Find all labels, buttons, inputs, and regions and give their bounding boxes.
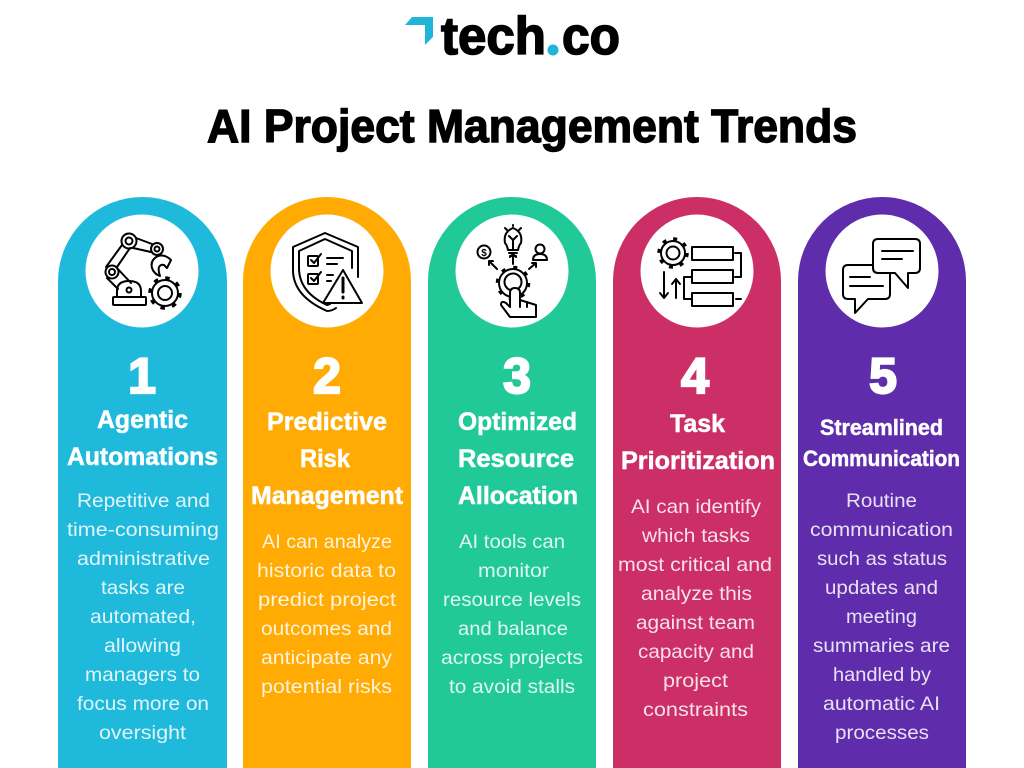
- body text: [257, 531, 397, 698]
- body text: [67, 490, 219, 744]
- heading: Streamlined: [820, 415, 943, 440]
- body text: resource levels: [443, 589, 581, 611]
- number 1: 1: [128, 348, 156, 404]
- icon: speech bubbles: [843, 239, 920, 313]
- body text: meeting: [846, 606, 917, 628]
- body text: against team: [636, 612, 755, 634]
- icon: gear, hand and resources: $: [481, 248, 487, 259]
- body text: automated,: [90, 606, 196, 628]
- body text: communication: [810, 519, 953, 541]
- body text: Routine: [846, 490, 917, 512]
- body text: [618, 496, 772, 721]
- heading: Risk: [300, 445, 350, 473]
- body text: most critical and: [618, 554, 772, 576]
- number 2: 2: [313, 348, 341, 404]
- body text: such as status: [817, 548, 947, 570]
- body text: summaries are: [813, 635, 950, 657]
- heading: Automations: [67, 443, 218, 471]
- body text: [810, 490, 953, 744]
- heading: Task: [670, 410, 725, 438]
- heading: Optimized: [458, 408, 577, 436]
- panel: task prioritization: [613, 197, 781, 768]
- body text: Repetitive and: [77, 490, 210, 512]
- body text: to avoid stalls: [449, 676, 575, 698]
- panel: optimized resource allocation: [428, 197, 596, 768]
- body text: [441, 531, 583, 698]
- logo: tech.co: tech: [441, 7, 546, 66]
- body text: which tasks: [641, 525, 750, 547]
- body text: processes: [835, 722, 929, 744]
- body text: administrative: [77, 548, 210, 570]
- icon: shield checklist with warning: [293, 233, 362, 311]
- icon: robot arm and gear: [106, 234, 180, 308]
- body text: focus more on: [77, 693, 209, 715]
- body text: monitor: [478, 560, 550, 582]
- heading: Resource: [458, 445, 574, 473]
- body text: oversight: [99, 722, 187, 744]
- panel: agentic automations: [58, 197, 227, 768]
- body text: time-consuming: [67, 519, 219, 541]
- body text: AI tools can: [459, 531, 565, 553]
- icon: gear, hand and resources: [478, 225, 547, 317]
- heading: [803, 415, 960, 471]
- panel: predictive risk management: [243, 197, 411, 768]
- body text: tasks are: [101, 577, 185, 599]
- heading: [67, 406, 218, 471]
- body text: handled by: [833, 664, 931, 686]
- title: AI Project Management Trends: [207, 100, 857, 152]
- body text: AI can analyze: [262, 531, 392, 553]
- body text: historic data to: [257, 560, 396, 582]
- body text: capacity and: [638, 641, 754, 663]
- number 5: 5: [869, 348, 897, 404]
- logo: tech.co: [405, 7, 620, 66]
- body text: analyze this: [641, 583, 752, 605]
- body text: anticipate any: [261, 647, 392, 669]
- heading: [458, 408, 578, 510]
- heading: Allocation: [458, 482, 578, 510]
- heading: Predictive: [267, 408, 387, 436]
- body text: automatic AI: [823, 693, 940, 715]
- body text: predict project: [258, 589, 397, 611]
- body text: across projects: [441, 647, 583, 669]
- heading: Agentic: [97, 406, 188, 434]
- body text: and balance: [458, 618, 568, 640]
- body text: AI can identify: [631, 496, 761, 518]
- number 3: 3: [503, 348, 531, 404]
- body text: project: [663, 670, 729, 692]
- body text: constraints: [643, 699, 748, 721]
- logo: tech.co: co: [562, 7, 620, 66]
- heading: [251, 408, 404, 510]
- body text: updates and: [825, 577, 938, 599]
- number 4: 4: [681, 348, 709, 404]
- heading: [621, 410, 775, 475]
- icon: gear, priority list and arrows: [659, 239, 741, 306]
- panel: streamlined communication: [798, 197, 966, 768]
- heading: Prioritization: [621, 447, 775, 475]
- body text: allowing: [104, 635, 181, 657]
- body text: potential risks: [261, 676, 392, 698]
- body text: managers to: [85, 664, 200, 686]
- heading: Management: [251, 482, 404, 510]
- heading: Communication: [803, 446, 960, 471]
- body text: outcomes and: [261, 618, 392, 640]
